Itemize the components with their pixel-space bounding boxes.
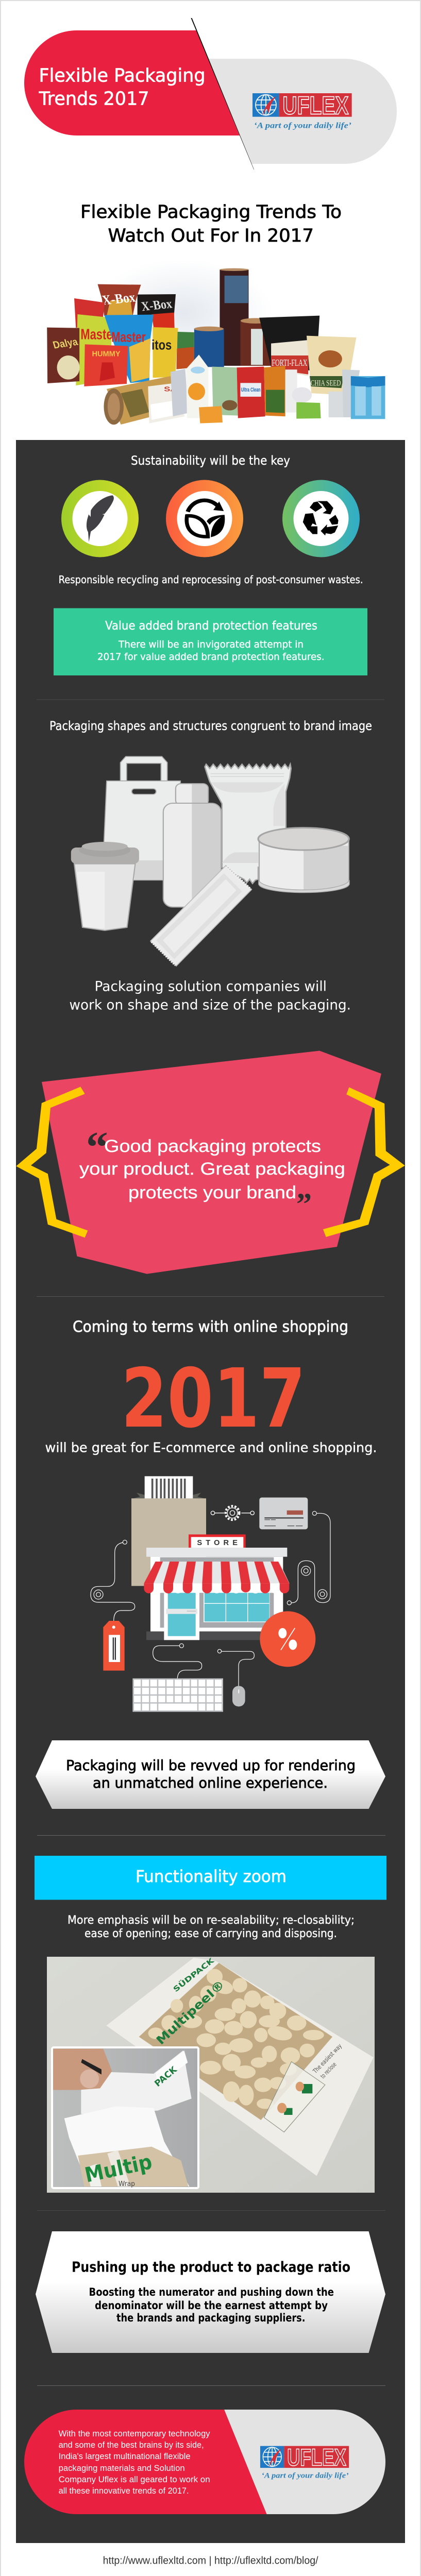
footer text: India's largest multinational flexible	[59, 2451, 191, 2461]
shopping bag and receipt	[131, 1476, 206, 1586]
big number 2017: 2017	[121, 1351, 306, 1446]
quote text: your product. Great packaging	[79, 1159, 345, 1179]
quote background	[42, 1051, 381, 1274]
inset photo: opening the pouch: PACK	[153, 2064, 179, 2089]
panel: functionality zoom: Functionality zoom	[136, 1867, 287, 1886]
opening quote mark: “	[86, 1123, 108, 1172]
inset photo: opening the pouch: Wrap	[119, 2180, 135, 2188]
footer text: and some of the best brains by its side,	[59, 2440, 204, 2450]
quote text	[79, 1137, 345, 1202]
awning	[144, 1562, 290, 1594]
footer text: With the most contemporary technology	[59, 2429, 210, 2438]
pouch	[205, 764, 291, 884]
heading: sustainability: Sustainability will be the key	[131, 453, 290, 468]
product photo: assorted flexible packaging: Dalya	[52, 336, 79, 351]
right bracket	[323, 1087, 405, 1237]
footer text: all these innovative trends of 2017.	[59, 2486, 189, 2496]
icon: recycling	[282, 480, 360, 557]
reclose label	[264, 2062, 325, 2132]
header title	[39, 65, 205, 109]
header gray pill	[208, 59, 397, 164]
text: more emphasis: ease of opening; ease of carrying and disposing.	[85, 1927, 337, 1940]
panel: value added features: 2017 for value added brand protection features.	[97, 651, 325, 663]
photo: resealable pistachio pouch: The easiest way	[311, 2042, 343, 2075]
callout: product to package ratio: Pushing up the product to package ratio	[72, 2259, 350, 2275]
footer banner	[24, 2410, 385, 2514]
connector wires	[91, 1511, 330, 1686]
callout: product to package ratio	[36, 2231, 385, 2353]
store sign: STORE	[197, 1539, 238, 1547]
callout: product to package ratio: denominator will be the earnest attempt by	[95, 2299, 328, 2312]
logo: Uflex header	[252, 92, 352, 130]
store sign	[189, 1534, 246, 1548]
product photo: assorted flexible packaging: SA	[164, 385, 177, 393]
main title: Watch Out For In 2017	[108, 226, 314, 246]
main title: Flexible Packaging Trends To	[80, 202, 342, 223]
header red pill	[24, 30, 240, 135]
header title: Trends 2017	[39, 89, 149, 109]
keyboard	[133, 1679, 223, 1711]
callout: online experience	[36, 1740, 385, 1809]
product photo: assorted flexible packaging: HUMMY	[92, 349, 121, 358]
logo: Uflex footer: UFLEX	[287, 2444, 346, 2471]
left bracket	[16, 1087, 88, 1238]
footer text: Company Uflex is all geared to work on	[59, 2475, 210, 2484]
header banner	[24, 18, 397, 170]
product photo: assorted flexible packaging: X-Box	[100, 289, 137, 308]
gear connector	[211, 1506, 254, 1520]
panel: value added features: Value added brand protection features	[105, 619, 317, 633]
logo: Uflex header: ‘A part of your daily life’	[254, 121, 351, 130]
snack bar wrapper	[150, 866, 251, 966]
product photo: assorted flexible packaging: Maste	[80, 326, 112, 343]
product photo: assorted flexible packaging: CHIA SEED	[311, 379, 341, 387]
percent badge	[260, 1611, 315, 1667]
callout: online experience: Packaging will be revved up for rendering	[66, 1757, 356, 1774]
dark panel	[16, 440, 405, 2543]
logo: Uflex footer	[260, 2444, 349, 2480]
callout: product to package ratio: the brands and packaging suppliers.	[116, 2312, 305, 2324]
logo: Uflex footer: ‘A part of your daily life’	[261, 2472, 349, 2480]
callout: product to package ratio: Boosting the numerator and pushing down the	[89, 2286, 334, 2298]
logo: Uflex header: UFLEX	[282, 92, 349, 120]
inset photo: opening the pouch: Multip	[83, 2150, 154, 2188]
tin can	[258, 828, 349, 893]
quote text: protects your brand	[128, 1183, 296, 1202]
inset photo: opening the pouch	[52, 2047, 198, 2188]
text: more emphasis: More emphasis will be on re-sealability; re-closability;	[68, 1914, 355, 1927]
panel: value added features: There will be an invigorated attempt in	[118, 639, 304, 650]
pouch brand text: SÜDPACK	[171, 1955, 216, 1994]
pouch body	[106, 1958, 374, 2176]
panel: functionality zoom	[35, 1856, 386, 1900]
footer red pill	[24, 2410, 267, 2514]
product photo: assorted flexible packaging: X-Box	[140, 296, 174, 314]
product photo: assorted flexible packaging: itos	[151, 337, 172, 352]
credit card	[259, 1498, 308, 1529]
header title: Flexible Packaging	[39, 65, 205, 87]
footer text: packaging materials and Solution	[59, 2463, 185, 2473]
panel: value added features	[54, 608, 367, 675]
icon: feather	[61, 480, 139, 557]
closing quote mark: ”	[296, 1187, 312, 1221]
photo: resealable pistachio pouch: to reclose	[319, 2061, 338, 2080]
text: responsible recycling: Responsible recycling and reprocessing of post-consumer wastes.	[59, 573, 363, 586]
text: e-commerce: will be great for E-commerce and online shopping.	[45, 1440, 377, 1456]
header diagonal line	[191, 18, 254, 170]
photo: resealable pistachio pouch	[47, 1955, 375, 2193]
paper bag	[102, 756, 180, 880]
coffee cup	[71, 842, 139, 930]
quote text: Good packaging protects	[104, 1137, 321, 1156]
store building	[146, 1548, 287, 1640]
footer gray pill	[224, 2410, 385, 2514]
icon: bio leaf cycle	[166, 480, 243, 557]
main title	[80, 202, 342, 246]
price tag	[103, 1621, 125, 1671]
heading: packaging shapes: Packaging shapes and structures congruent to brand image	[49, 719, 372, 733]
illustration: online store	[91, 1476, 330, 1711]
text: packaging solution: Packaging solution companies will	[95, 979, 327, 995]
product photo: assorted flexible packaging: FORTI-FLAX	[272, 358, 308, 368]
footer links: http://www.uflexltd.com | http://uflexltd.com/blog/	[103, 2555, 318, 2567]
mouse	[232, 1686, 245, 1706]
bottle	[163, 784, 221, 907]
quote block	[16, 1051, 405, 1274]
text: packaging solution: work on shape and size of the packaging.	[69, 997, 351, 1013]
product photo: assorted flexible packaging	[47, 259, 385, 425]
illustration: blank packaging	[71, 756, 349, 966]
heading: online shopping: Coming to terms with online shopping	[73, 1318, 348, 1335]
footer text	[59, 2429, 210, 2496]
callout: online experience: an unmatched online experience.	[93, 1774, 328, 1791]
product photo: assorted flexible packaging: Master	[111, 329, 146, 345]
product photo: assorted flexible packaging: Ultra Clean	[241, 386, 261, 393]
photo: resealable pistachio pouch: Multipeel®	[154, 1978, 228, 2047]
text: more emphasis	[68, 1914, 355, 1940]
text: packaging solution	[69, 979, 351, 1013]
